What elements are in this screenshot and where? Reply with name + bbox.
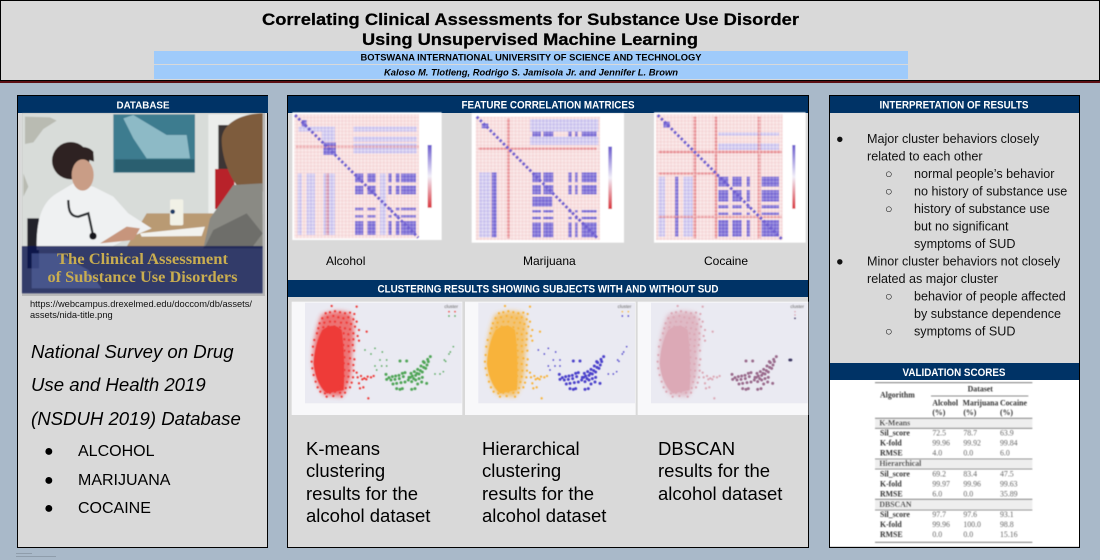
validation table: Algorithm [880,390,915,399]
validation table: K-fold [880,479,902,488]
database name: National Survey on Drug [31,341,234,362]
heatmap labels: Cocaine [704,254,748,268]
caption: hierarchical: clustering [482,460,561,481]
validation table: 100.0 [963,520,981,529]
validation heading [830,363,1079,380]
substance list: MARIJUANA [78,472,171,489]
interpretation list: ○ [885,324,893,338]
interpretation list: related to each other [867,150,983,164]
banner caption line 2: of Substance Use Disorders [48,269,238,286]
panel: database [18,96,268,548]
image source url: https://webcampus.drexelmed.edu/doccom/db/assets/ [30,299,252,309]
substance list [44,443,171,517]
clustering heading [288,280,808,297]
caption: dbscan: results for the [658,460,770,481]
correlation heading: FEATURE CORRELATION MATRICES [462,100,634,112]
validation table: (%) [1000,408,1013,417]
scatter: hierarchical: cluster [618,304,632,309]
scatter: dbscan: cluster [790,304,804,309]
interpretation heading: INTERPRETATION OF RESULTS [880,100,1028,112]
caption: hierarchical [482,438,606,526]
interpretation list: ○ [885,202,893,216]
validation table: Marijuana [963,399,998,408]
colorbar [792,145,795,209]
validation table: 0.0 [963,530,973,539]
validation table: 99.96 [932,439,950,448]
validation table: 99.63 [1000,479,1018,488]
interpretation list: history of substance use [914,202,1050,216]
validation table: 4.0 [932,449,942,458]
validation table: Alcohol [932,399,959,408]
interpretation list: behavior of people affected [914,290,1066,304]
substance list: ● [44,472,54,489]
caption: dbscan: DBSCAN [658,438,735,459]
university bar [154,51,908,64]
validation table: 35.89 [1000,489,1018,498]
validation heading: VALIDATION SCORES [902,367,1006,379]
validation table: K-fold [880,439,902,448]
caption: dbscan [658,438,782,504]
interpretation list: related as major cluster [867,272,998,286]
validation table: Hierarchical [879,459,922,468]
validation table: 6.0 [932,489,942,498]
interpretation list: no history of substance use [914,184,1067,198]
validation table: (%) [963,408,977,417]
validation table: 93.1 [1000,510,1014,519]
authors bar: Kaloso M. Tlotleng, Rodrigo S. Jamisola Jr. and Jennifer L. Brown [384,68,679,78]
interpretation list: symptoms of SUD [914,237,1015,251]
validation table: Dataset [968,385,993,394]
header band [0,0,1100,83]
caption: k-means: clustering [306,460,385,481]
database name: Use and Health 2019 [31,374,206,395]
caption: k-means: K-means [306,438,380,459]
substance list: COCAINE [78,500,151,517]
validation table: Sil_score [880,429,910,438]
colorbar [428,145,432,208]
interpretation list: Major cluster behaviors closely [867,132,1040,146]
validation table: 6.0 [1000,449,1010,458]
scatter: dbscan [638,302,808,415]
validation table: RMSE [880,489,903,498]
photo: clinical assessment [22,113,265,296]
validation table: 97.7 [932,510,946,519]
substance list: ● [44,500,54,517]
panel: interpretation [830,96,1080,548]
footer fine print [16,554,56,556]
validation table: (%) [932,408,946,417]
validation table: 15.16 [1000,530,1018,539]
validation table: 99.97 [932,479,950,488]
interpretation list: symptoms of SUD [914,324,1015,338]
validation table [830,380,1079,546]
heatmap labels: Alcohol [326,254,365,268]
heatmap: alcohol [292,112,442,240]
interpretation list: ○ [885,167,893,181]
validation table: Cocaine [1000,399,1027,408]
validation table: Sil_score [880,469,910,478]
database name: (NSDUH 2019) Database [31,408,241,429]
validation table: 0.0 [963,489,973,498]
caption: hierarchical: Hierarchical [482,438,580,459]
scatter: hierarchical [465,302,636,415]
caption: hierarchical: alcohol dataset [482,505,606,526]
interpretation list: ○ [885,290,893,304]
heatmap labels: Marijuana [523,254,576,268]
scatter: k-means: cluster [444,304,458,309]
clustering heading: CLUSTERING RESULTS SHOWING SUBJECTS WITH AND WITHOUT SUD [378,284,719,296]
image source url: assets/nida-title.png [30,310,113,320]
interpretation list [836,132,1067,338]
substance list: ● [44,443,54,460]
validation table: 99.84 [1000,439,1018,448]
image source url [30,299,252,320]
colorbar [608,147,612,209]
interpretation list: normal people’s behavior [914,167,1054,181]
title: Correlating Clinical Assessments for Substance Use Disorder [262,10,799,29]
validation table: RMSE [880,530,903,539]
validation table: 72.5 [932,429,946,438]
validation table: K-fold [880,520,902,529]
validation table: 83.4 [963,469,977,478]
validation table: 99.96 [932,520,950,529]
caption: dbscan: alcohol dataset [658,483,782,504]
validation table: 97.6 [963,510,977,519]
database heading [18,96,268,113]
validation table: 99.96 [963,479,981,488]
scatter: k-means [292,302,462,415]
heatmap: marijuana [472,113,624,243]
authors bar [154,65,908,79]
heatmap labels [326,254,748,268]
title line 2: Using Unsupervised Machine Learning [362,30,698,49]
validation table: 69.2 [932,469,946,478]
interpretation list: ● [836,132,844,146]
validation table: Sil_score [880,510,910,519]
validation table: 47.5 [1000,469,1014,478]
validation table: 98.8 [1000,520,1014,529]
caption: k-means: alcohol dataset [306,505,430,526]
interpretation list: ○ [885,184,893,198]
caption: k-means: results for the [306,483,418,504]
interpretation list: ● [836,254,844,268]
caption: hierarchical: results for the [482,483,594,504]
validation table: 78.7 [963,429,977,438]
substance list: ALCOHOL [78,443,155,460]
validation table: 0.0 [963,449,973,458]
validation table: K-Means [879,418,910,427]
database name [31,341,241,429]
validation table: DBSCAN [879,500,912,509]
interpretation list: but no significant [914,220,1009,234]
validation table: 63.9 [1000,429,1014,438]
heatmap: cocaine [654,112,806,243]
banner caption: The Clinical Assessment [57,251,229,268]
caption: k-means [306,438,430,526]
interpretation list: Minor cluster behaviors not closely [867,254,1061,268]
interpretation list: by substance dependence [914,307,1061,321]
database heading: DATABASE [116,100,170,112]
validation table: 99.92 [963,439,981,448]
correlation heading [288,96,808,113]
validation table: RMSE [880,449,903,458]
university bar: BOTSWANA INTERNATIONAL UNIVERSITY OF SCIENCE AND TECHNOLOGY [360,52,702,62]
validation table: 0.0 [932,530,942,539]
interpretation heading [830,96,1079,113]
panel: results [288,96,808,548]
